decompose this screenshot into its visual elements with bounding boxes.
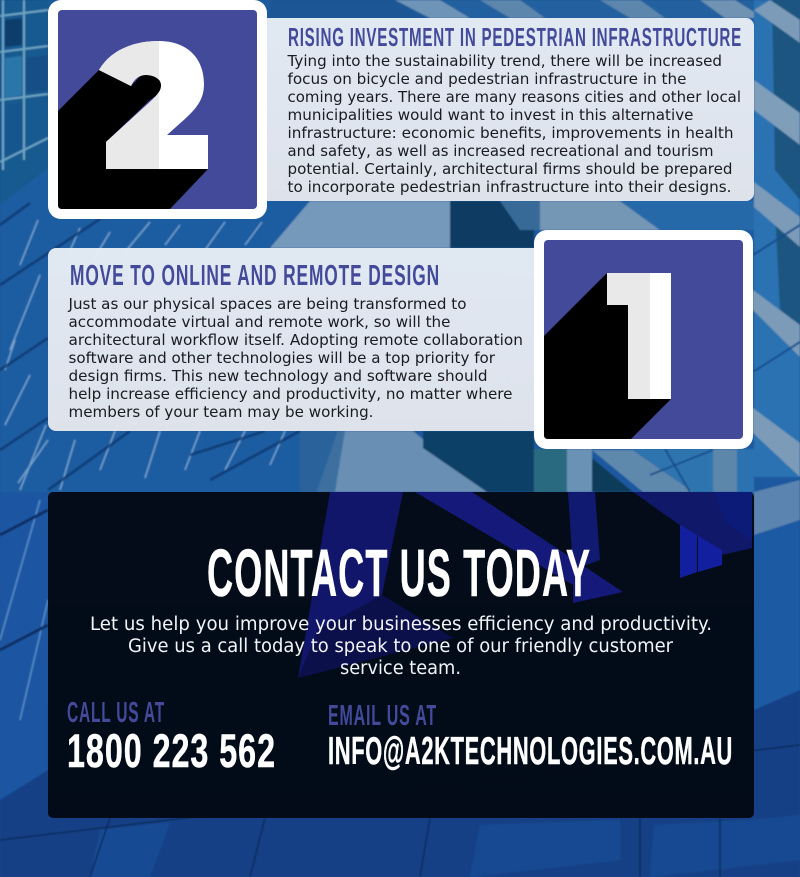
text block: move to online body: accommodate virtual and remote work, so will the xyxy=(68,313,450,331)
text block: rising investment body xyxy=(286,52,741,196)
card: number 2 badge xyxy=(48,0,267,219)
panel: contact us xyxy=(48,492,754,818)
text block: rising investment body: Tying into the sustainability trend, there will be increased xyxy=(286,52,722,70)
text block: contact invitation: Give us a call today to speak to one of our friendly customer xyxy=(128,636,673,657)
text block: move to online body: architectural workflow itself. Adopting remote collaboration xyxy=(68,331,523,349)
phone contact: 1800 223 562 xyxy=(67,724,276,777)
text block: rising investment body: focus on bicycle and pedestrian infrastructure in the xyxy=(288,70,686,88)
text block: move to online body: design firms. This new technology and software should xyxy=(68,367,487,385)
text block: move to online body: members of your team may be working. xyxy=(68,403,374,421)
text block: rising investment body: infrastructure: economic benefits, improvements in health xyxy=(288,124,734,142)
card: number 1 badge xyxy=(534,230,753,449)
text block: contact invitation: service team. xyxy=(340,658,461,679)
text block: rising investment body: to incorporate pedestrian infrastructure into their designs. xyxy=(288,178,732,196)
email contact: EMAIL US AT xyxy=(328,700,437,732)
text block: contact invitation xyxy=(90,614,712,679)
heading: move to online: MOVE TO ONLINE AND REMOTE DESIGN xyxy=(70,260,440,292)
text block: rising investment body: coming years. There are many reasons cities and other local xyxy=(288,88,741,106)
email contact xyxy=(328,700,733,773)
phone contact xyxy=(67,697,276,777)
text block: rising investment body: potential. Certainly, architectural firms should be prepared xyxy=(288,160,732,178)
icon: numeral 2 xyxy=(99,41,208,169)
phone contact: CALL US AT xyxy=(67,697,165,729)
icon: number 2 long shadow xyxy=(58,70,208,209)
text block: move to online body: software and other technologies will be a top priority for xyxy=(68,349,496,367)
text block: contact invitation: Let us help you improve your businesses efficiency and productivity. xyxy=(90,614,712,635)
text block: rising investment body: municipalities would want to invest in this alternative xyxy=(288,106,694,124)
text block: move to online body: help increase efficiency and productivity, no matter where xyxy=(68,385,512,403)
text block: move to online body xyxy=(67,295,523,421)
text block: move to online body: Just as our physical spaces are being transformed to xyxy=(67,295,467,313)
panel: number 1 text backing xyxy=(48,248,548,431)
text block: rising investment body: and safety, as well as increased recreational and tourism xyxy=(288,142,714,160)
icon: numeral 1 xyxy=(607,273,671,399)
icon: number 1 long shadow xyxy=(544,273,671,439)
panel: number 2 text backing xyxy=(255,18,754,201)
